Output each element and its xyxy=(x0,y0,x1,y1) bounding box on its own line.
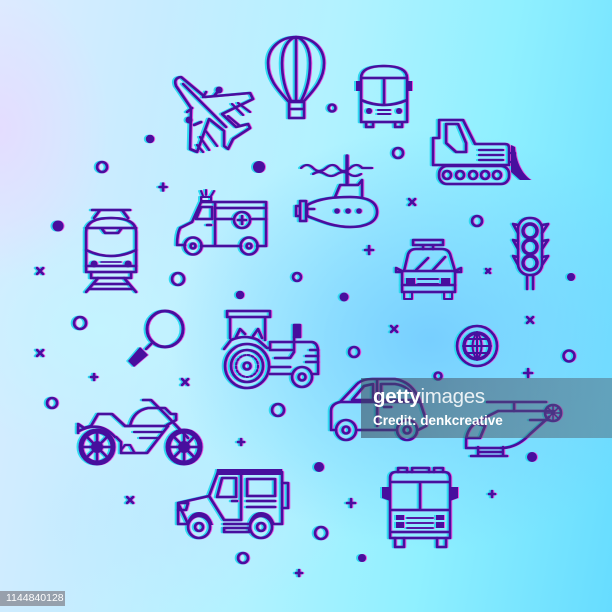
icon: magnifying glass xyxy=(128,311,183,367)
icon: train xyxy=(86,210,136,292)
icon: motorcycle xyxy=(78,400,200,463)
icon: airplane xyxy=(175,77,253,152)
icon: police car front xyxy=(396,240,461,299)
icon: submarine xyxy=(296,156,377,227)
icon: tractor xyxy=(224,311,318,388)
icon: car xyxy=(331,379,426,440)
icon: bulldozer xyxy=(433,120,531,184)
watermark credit text: Credit: denkcreative xyxy=(373,413,503,428)
icon: traffic light xyxy=(513,218,548,289)
decorative markers: crosses xyxy=(37,199,533,503)
image id label: 1144840128 xyxy=(6,592,64,604)
decorative markers: rings xyxy=(47,104,574,563)
icon: helicopter xyxy=(466,402,561,456)
decorative markers: filled dots xyxy=(52,135,575,562)
watermark: getty images banner xyxy=(361,378,612,438)
icon: jeep xyxy=(178,469,288,538)
icon: globe badge xyxy=(457,326,497,366)
icon: hot air balloon xyxy=(268,37,324,118)
icon: ambulance xyxy=(177,190,266,254)
icon: fire truck front xyxy=(382,468,458,547)
decorative markers: plus signs xyxy=(91,184,532,576)
icon: bus front xyxy=(356,66,412,127)
watermark logo text: gettyimages xyxy=(373,385,485,408)
